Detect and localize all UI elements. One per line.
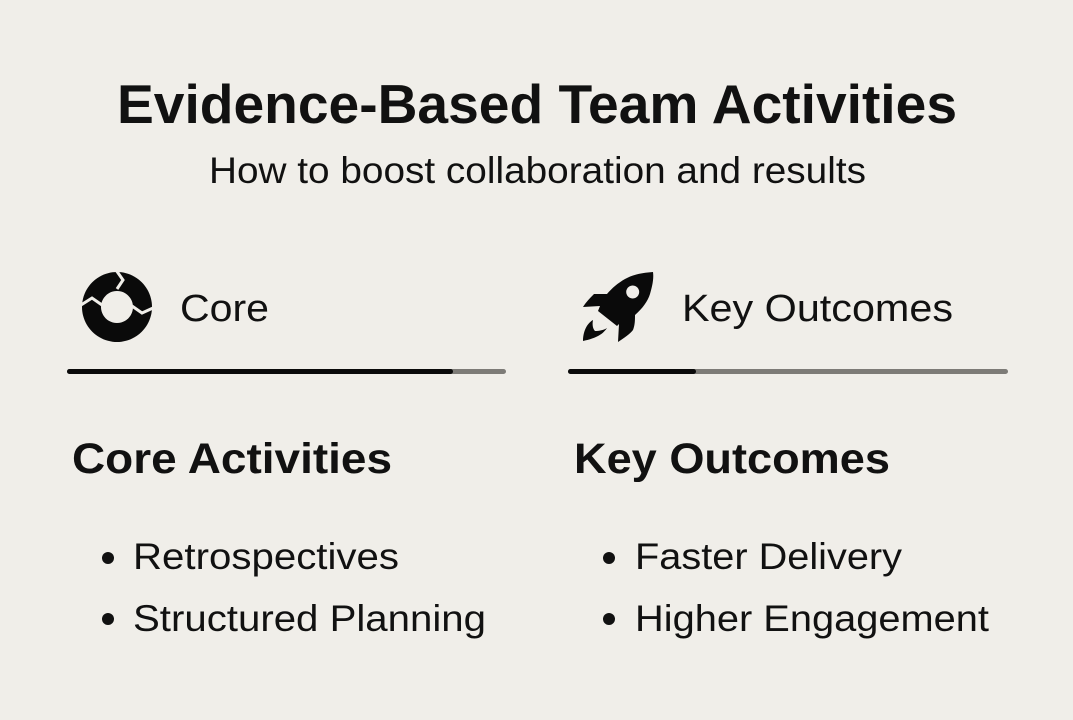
panel: key outcomes (568, 272, 1008, 639)
bullet list: core activities: Structured Planning (133, 598, 486, 639)
panel heading label: Core: Core (180, 288, 269, 330)
subtitle: How to boost collaboration and results (209, 150, 866, 191)
icon: circular cycle (81, 270, 153, 342)
bullet list: key outcomes (603, 536, 990, 639)
progress bar: core (67, 369, 506, 374)
panel: core activities (67, 270, 506, 639)
panel heading label: Key Outcomes: Key Outcomes (682, 288, 953, 330)
bullet list: key outcomes: Faster Delivery (635, 536, 903, 577)
bullet list: core activities (102, 536, 486, 639)
progress bar: key outcomes (568, 369, 1008, 374)
title: Evidence-Based Team Activities (117, 73, 957, 135)
heading: Core Activities: Core Activities (72, 435, 392, 483)
icon: rocket (583, 272, 653, 342)
bullet list: key outcomes: Higher Engagement (635, 598, 990, 639)
heading: Key Outcomes: Key Outcomes (574, 435, 890, 483)
bullet list: core activities: Retrospectives (133, 536, 399, 577)
